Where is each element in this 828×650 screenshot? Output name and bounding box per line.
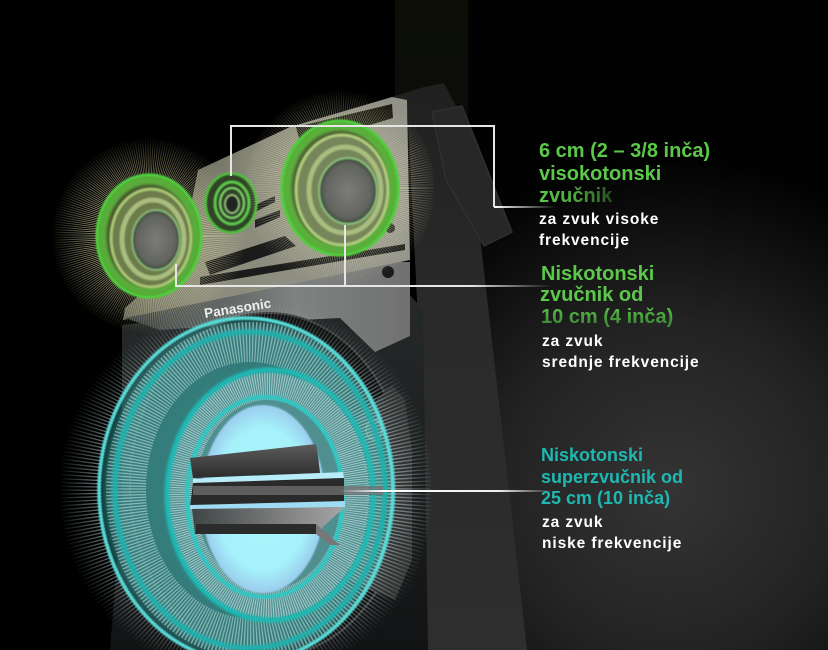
description: za zvuk xyxy=(542,333,603,350)
heading: visokotonski xyxy=(539,163,661,185)
haze xyxy=(205,173,257,233)
outer halo lines xyxy=(81,300,411,650)
description: frekvencije xyxy=(539,232,630,249)
speaker body xyxy=(97,175,201,297)
heading: zvučnik od xyxy=(540,284,643,306)
subwoofer xyxy=(81,300,411,650)
heading: 10 cm (4 inča) xyxy=(541,306,673,328)
outer rim xyxy=(97,175,201,297)
middle radial hatch xyxy=(181,386,355,604)
outer teal ring xyxy=(99,318,393,650)
outer rim xyxy=(282,121,398,255)
grill xyxy=(319,158,377,224)
cabinet front dark panel xyxy=(110,295,428,650)
blue bar 1 xyxy=(193,472,344,483)
description: za zvuk visoke xyxy=(539,211,659,228)
middle teal ring xyxy=(167,370,373,620)
description: srednje frekvencije xyxy=(542,354,700,371)
heading: zvučnik xyxy=(539,185,613,207)
description: niske frekvencije xyxy=(542,535,682,552)
upper panel slots xyxy=(200,196,405,285)
bracket screw bottom xyxy=(367,533,381,549)
inner light ring xyxy=(309,147,381,233)
middle base xyxy=(168,373,368,617)
right mid speaker xyxy=(268,106,412,270)
heading xyxy=(539,140,710,207)
brand logo: Panasonic xyxy=(203,296,273,321)
inner light ring xyxy=(122,200,184,278)
inner cone xyxy=(111,189,191,287)
heading: Niskotonski xyxy=(541,445,643,465)
blue bar 2 xyxy=(190,501,345,509)
top bar block xyxy=(190,444,320,478)
tweeter callout line xyxy=(231,126,494,207)
tweeter xyxy=(205,173,257,233)
upper frame cutout xyxy=(296,104,393,142)
rings xyxy=(215,182,249,224)
description xyxy=(542,514,682,552)
heading xyxy=(540,263,673,328)
label: subwoofer xyxy=(541,445,683,552)
right bracket xyxy=(335,385,412,600)
upper silver panel xyxy=(123,97,410,320)
heading: 25 cm (10 inča) xyxy=(541,488,670,508)
bracket screw top xyxy=(366,420,382,440)
description xyxy=(542,333,700,371)
ring hatch xyxy=(287,126,393,250)
ring hatch xyxy=(102,180,196,292)
heading: 6 cm (2 – 3/8 inča) xyxy=(539,140,710,162)
grill xyxy=(132,210,180,270)
description xyxy=(539,211,659,249)
speaker cabinet xyxy=(110,83,527,650)
radial haze xyxy=(77,156,221,316)
radial haze xyxy=(268,106,412,270)
cabinet side panel xyxy=(392,83,527,650)
left mid speaker xyxy=(77,156,221,316)
label: tweeter xyxy=(539,140,710,249)
glowing core xyxy=(201,405,325,593)
label: midrange xyxy=(540,263,700,371)
heading: Niskotonski xyxy=(541,263,654,285)
heading: superzvučnik od xyxy=(541,467,683,487)
woofer callout line xyxy=(340,490,552,492)
heading xyxy=(541,445,683,508)
outer radial hatch xyxy=(126,342,374,638)
inner teal ring xyxy=(187,397,343,597)
teal haze xyxy=(100,317,396,650)
side handle xyxy=(432,106,512,246)
callout lines xyxy=(176,126,556,491)
mid bar block xyxy=(190,478,344,507)
bottom bar block xyxy=(192,507,345,534)
inner cone xyxy=(296,135,388,245)
description: za zvuk xyxy=(542,514,603,531)
speaker body xyxy=(282,121,398,255)
midrange callout line xyxy=(176,225,470,286)
woofer dark surround xyxy=(130,313,406,650)
rim xyxy=(206,174,256,232)
lower silver brace xyxy=(125,262,410,352)
